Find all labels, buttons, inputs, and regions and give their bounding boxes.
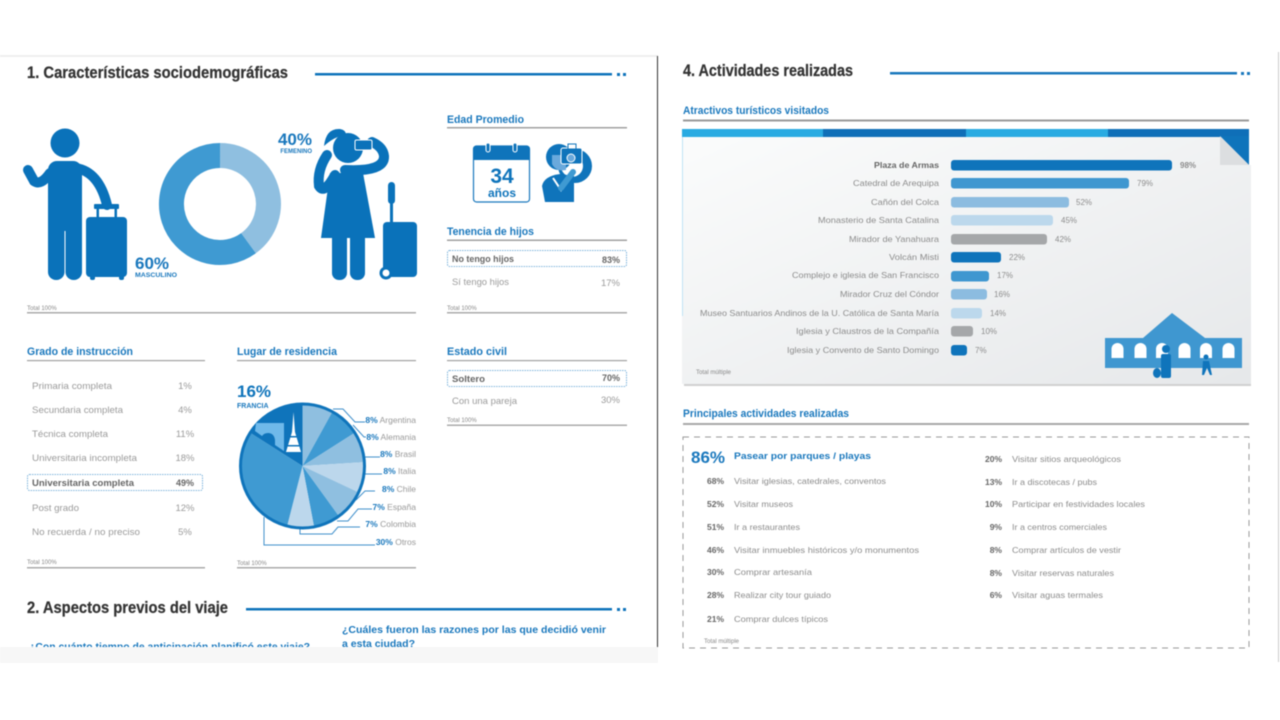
left column: 30% xyxy=(707,567,724,577)
donut chart: gender xyxy=(171,155,268,252)
right column: 10% xyxy=(985,499,1002,509)
left column: 46% xyxy=(707,545,724,555)
left column: 21% xyxy=(707,614,724,624)
pie labels: 7% España xyxy=(372,502,416,512)
panel: tenencia de hijos: Tenencia de hijos xyxy=(447,226,534,238)
icon: calendar 34 años: años xyxy=(488,186,516,200)
right column: 8% xyxy=(990,545,1002,555)
icon: arch and eiffel tower xyxy=(255,412,301,452)
label: 60% masculino: MASCULINO xyxy=(135,272,177,279)
right column: 20% xyxy=(985,454,1002,464)
text: question on reasons: ¿Cuáles fueron las razones por las que decidió venir xyxy=(342,624,606,636)
panel: tenencia de hijos: Total 100% xyxy=(447,306,477,312)
panel: grado de instrucción xyxy=(27,346,205,568)
bar labels: Volcán Misti xyxy=(889,252,939,262)
pie labels: 8% Brasil xyxy=(380,449,416,459)
right column: Comprar artículos de vestir xyxy=(1012,545,1121,555)
icon: male traveller xyxy=(28,128,127,280)
panel: tenencia de hijos: Sí tengo hijos xyxy=(452,277,509,288)
panel: edad promedio: Edad Promedio xyxy=(447,114,524,126)
pie labels: 8% Argentina xyxy=(365,415,416,425)
pie chart: residence xyxy=(240,404,365,528)
left column: 51% xyxy=(707,522,724,532)
panel: grado de instrucción: 1% xyxy=(178,381,192,392)
left column: Comprar dulces típicos xyxy=(734,614,828,624)
right column: Ir a centros comerciales xyxy=(1012,522,1107,532)
panel: grado de instrucción: 12% xyxy=(175,503,195,514)
right column: 13% xyxy=(985,477,1002,487)
bar labels: Complejo e iglesia de San Francisco xyxy=(792,270,939,280)
pie labels: 7% Colombia xyxy=(365,519,416,529)
heading: atractivos turísticos visitados: Atractivos turísticos visitados xyxy=(683,105,829,117)
bar values: 10% xyxy=(981,327,997,336)
panel: section 1 heading xyxy=(27,63,626,82)
bar labels xyxy=(700,160,939,355)
panel: section 4 heading xyxy=(683,61,1250,80)
panel: edad promedio xyxy=(447,114,627,202)
panel: estado civil: 30% xyxy=(601,395,621,406)
panel: lugar de residencia: Total 100% xyxy=(237,561,267,567)
footnote: sociodemographic total: Total 100% xyxy=(27,306,57,312)
panel: lugar de residencia: Lugar de residencia xyxy=(237,346,338,358)
panel: tenencia de hijos: No tengo hijos xyxy=(452,254,514,264)
bar values: 22% xyxy=(1009,253,1025,262)
top activity: 86%: 86% xyxy=(691,448,725,467)
icon: female traveller xyxy=(319,129,417,280)
panel: grado de instrucción: 18% xyxy=(175,453,195,464)
panel: grado de instrucción: Universitaria incompleta xyxy=(32,453,138,464)
bars xyxy=(951,160,1172,356)
panel: grado de instrucción: 49% xyxy=(176,478,194,488)
bar labels: Iglesia y Claustros de la Compañía xyxy=(796,326,939,336)
bar labels: Iglesia y Convento de Santo Domingo xyxy=(787,345,939,355)
panel: activities list xyxy=(683,437,1249,648)
bar labels: Mirador Cruz del Cóndor xyxy=(840,289,939,299)
bar values: 45% xyxy=(1061,216,1077,225)
panel: grado de instrucción: Post grado xyxy=(32,503,79,514)
text: question on reasons xyxy=(342,624,606,650)
left column: Realizar city tour guiado xyxy=(734,590,831,600)
text: question on trip planning: ¿Con cuánto tiempo de anticipación planificó este viaje? xyxy=(29,641,310,653)
left column: 68% xyxy=(707,476,724,486)
panel: estado civil: Con una pareja xyxy=(452,396,518,407)
bar values xyxy=(975,161,1196,355)
panel: grado de instrucción: Secundaria completa xyxy=(32,405,124,416)
panel: grado de instrucción: Universitaria completa xyxy=(32,478,135,488)
bar labels: Plaza de Armas xyxy=(874,160,939,170)
panel: attractions bar chart xyxy=(682,129,1251,386)
leader lines xyxy=(264,409,382,545)
panel: tenencia de hijos: 17% xyxy=(601,278,621,289)
pie labels xyxy=(365,415,416,547)
panel: attractions bar chart: Total múltiple xyxy=(696,370,732,376)
bar values: 42% xyxy=(1055,235,1071,244)
pie labels: 30% Otros xyxy=(376,537,416,547)
label: 60% masculino xyxy=(135,254,177,279)
pie labels: 8% Chile xyxy=(382,484,416,494)
panel: grado de instrucción: Total 100% xyxy=(27,560,57,566)
panel: section 1 heading: 1. Características sociodemográficas xyxy=(27,63,288,82)
panel: grado de instrucción: 5% xyxy=(178,527,192,538)
panel: tenencia de hijos xyxy=(447,226,627,314)
icon: calendar 34 años: 34 xyxy=(490,165,514,188)
right column xyxy=(985,454,1145,600)
panel: grado de instrucción: No recuerda / no preciso xyxy=(32,527,140,538)
label: 40% femenino: FEMENINO xyxy=(280,149,312,155)
bar values: 79% xyxy=(1137,179,1153,188)
bar labels: Cañón del Colca xyxy=(871,197,939,207)
label: 40% femenino: 40% xyxy=(278,130,312,149)
bar values: 16% xyxy=(994,290,1010,299)
panel: estado civil xyxy=(447,346,627,426)
right column: Participar en festividades locales xyxy=(1012,499,1145,509)
pie labels: 8% Italia xyxy=(383,466,416,476)
bar values: 98% xyxy=(1180,161,1196,170)
bar labels: Catedral de Arequipa xyxy=(853,178,939,188)
bar values: 7% xyxy=(975,346,987,355)
panel: grado de instrucción: Técnica completa xyxy=(32,429,109,440)
panel: grado de instrucción: 4% xyxy=(178,405,192,416)
bar labels: Monasterio de Santa Catalina xyxy=(818,215,939,225)
panel: section 4 heading: 4. Actividades realizadas xyxy=(683,61,853,80)
panel: estado civil: Total 100% xyxy=(447,418,477,424)
right column: 6% xyxy=(990,590,1002,600)
top activity: 86% xyxy=(691,448,871,467)
icon: photographer xyxy=(542,144,592,202)
panel: grado de instrucción: Grado de instrucción xyxy=(27,346,133,358)
icon: colonial building with tourists xyxy=(1105,313,1242,378)
bar labels: Museo Santuarios Andinos de la U. Católica de Santa María xyxy=(700,308,939,318)
right column: Visitar aguas termales xyxy=(1012,590,1103,600)
panel: estado civil: 70% xyxy=(602,373,620,383)
top activity: 86%: Pasear por parques / playas xyxy=(734,451,871,462)
label: 60% masculino: 60% xyxy=(135,254,169,273)
right column: 9% xyxy=(990,522,1002,532)
panel: lugar de residencia: 16% xyxy=(237,382,271,401)
bar labels: Mirador de Yanahuara xyxy=(849,234,939,244)
right column: Visitar reservas naturales xyxy=(1012,568,1114,578)
panel: section 2 heading: 2. Aspectos previos del viaje xyxy=(27,598,228,617)
text: question on reasons: a esta ciudad? xyxy=(342,638,415,650)
panel: activities list: Total múltiple xyxy=(704,639,740,645)
panel: lugar de residencia: FRANCIA xyxy=(237,403,268,410)
panel: tenencia de hijos: 83% xyxy=(602,255,620,265)
icon: calendar 34 años xyxy=(473,143,530,202)
left column: 52% xyxy=(707,499,724,509)
right column: 8% xyxy=(990,568,1002,578)
panel: section 2 heading xyxy=(27,598,626,617)
left column: Comprar artesanía xyxy=(734,567,812,577)
panel: estado civil: Soltero xyxy=(452,374,486,384)
left column: Visitar museos xyxy=(734,499,793,509)
panel: lugar de residencia xyxy=(237,346,416,568)
panel: estado civil: Estado civil xyxy=(447,346,507,358)
heading: principales actividades realizadas: Principales actividades realizadas xyxy=(683,408,849,420)
panel: grado de instrucción: 11% xyxy=(176,429,195,440)
left column: 28% xyxy=(707,590,724,600)
pie labels: 8% Alemania xyxy=(366,432,416,442)
left column: Ir a restaurantes xyxy=(734,522,800,532)
bar values: 14% xyxy=(990,309,1006,318)
left column: Visitar iglesias, catedrales, conventos xyxy=(734,476,886,486)
left column: Visitar inmuebles históricos y/o monumentos xyxy=(734,545,919,555)
left column xyxy=(707,476,919,624)
bar values: 52% xyxy=(1076,198,1092,207)
panel: grado de instrucción: Primaria completa xyxy=(32,381,113,392)
right column: Ir a discotecas / pubs xyxy=(1012,477,1097,487)
right column: Visitar sitios arqueológicos xyxy=(1012,454,1121,464)
bar values: 17% xyxy=(997,271,1013,280)
